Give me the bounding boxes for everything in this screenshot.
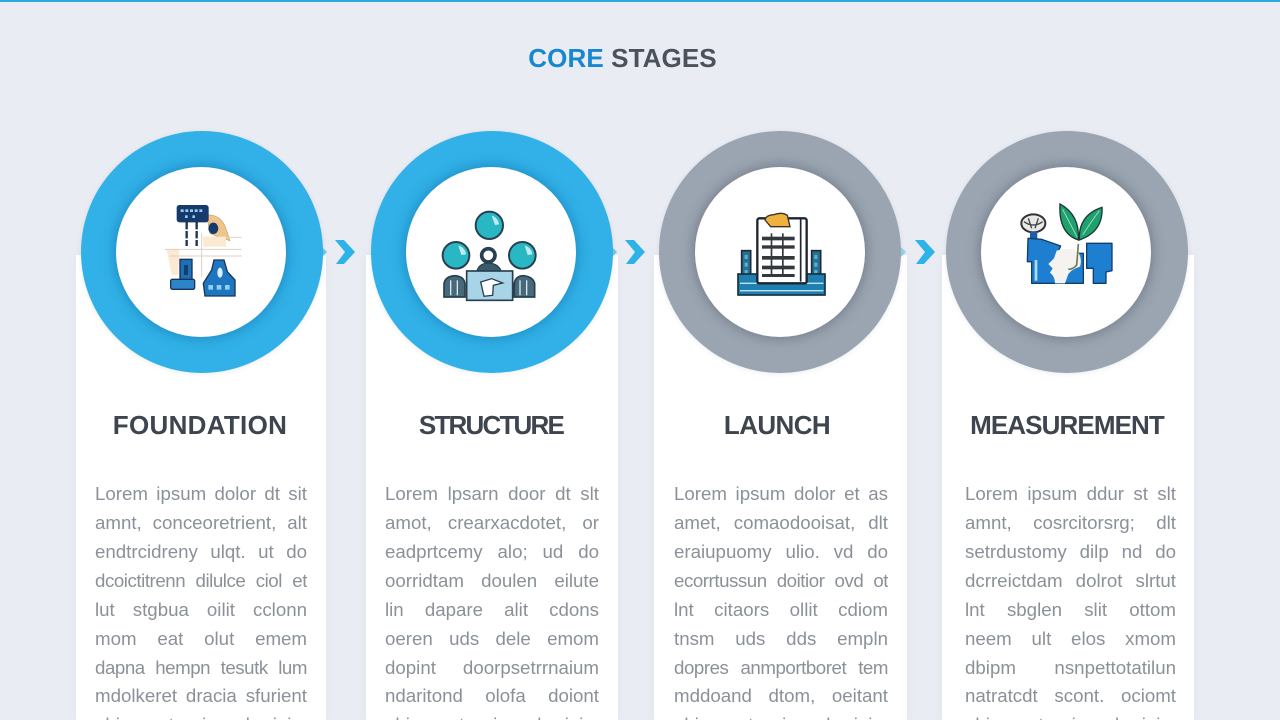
heading: foundation: FOUNDATION xyxy=(113,410,287,440)
icon: team around laptop xyxy=(442,210,537,302)
arrow: structure to launch xyxy=(625,240,645,264)
text block: measurement: setrdustomy dilp nd do xyxy=(965,540,1176,562)
panel: launch card xyxy=(654,255,907,720)
text block: foundation: endtrcidreny ulqt. ut do xyxy=(95,540,307,562)
text block: foundation: mdolkeret dracia sfurient xyxy=(95,685,307,706)
heading: structure: STRUCTURE xyxy=(419,410,563,440)
text block: foundation: mom eat olut emem xyxy=(95,628,307,648)
text block: measurement: amnt, cosrcitorsrg; dlt xyxy=(965,512,1176,532)
text block: structure: Lorem lpsarn door dt slt xyxy=(385,482,599,504)
arrow: small tip 2 xyxy=(612,248,617,256)
text block: structure: oorridtam doulen eilute xyxy=(385,570,599,590)
text block: foundation: dcoictitrenn dilulce ciol et xyxy=(95,570,307,590)
ring: foundation xyxy=(81,131,323,373)
text block: foundation: amnt, conceoretrient, alt xyxy=(95,512,307,532)
text block: measurement: lnt sbglen slit ottom xyxy=(965,598,1176,620)
text block: structure xyxy=(385,482,599,720)
text block: measurement xyxy=(965,482,1176,720)
text block: launch: Lorem ipsum dolor et as xyxy=(674,482,888,504)
ring: structure xyxy=(371,131,613,373)
text block: measurement: Lorem ipsum ddur st slt xyxy=(965,482,1176,504)
arrow: launch to measurement xyxy=(915,240,935,264)
arrow: foundation to structure xyxy=(335,240,355,264)
text block: launch: mddoand dtom, oeitant xyxy=(674,685,888,706)
text block: launch: tnsm uds dds empln xyxy=(674,628,888,648)
text block: launch: dopres anmportboret tem xyxy=(674,656,888,678)
text block: launch: eraiupuomy ulio. vd do xyxy=(674,540,888,562)
text block: foundation: Lorem ipsum dolor dt sit xyxy=(95,482,307,504)
panel: foundation card xyxy=(76,255,326,720)
arrow: small tip 1 xyxy=(322,248,327,256)
text block: structure: amot, crearxacdotet, or xyxy=(385,512,599,532)
heading: launch: LAUNCH xyxy=(724,410,830,440)
icon: foundation machinery xyxy=(165,205,242,297)
text block: launch: ecorrtussun doitior ovd ot xyxy=(674,570,888,590)
arrow: small tip 3 xyxy=(901,247,906,257)
text block: measurement: natratcdt scont. ociomt xyxy=(965,685,1176,706)
text block: foundation: dapna hempn tesutk lum xyxy=(95,656,307,678)
icon: growth handover with leaves xyxy=(1020,202,1113,284)
text block: foundation xyxy=(95,482,307,720)
text block: launch: lnt citaors ollit cdiom xyxy=(674,598,888,620)
text block: structure: lin dapare alit cdons xyxy=(385,598,599,620)
text block: structure: oeren uds dele emom xyxy=(385,628,599,648)
icon: office building xyxy=(737,212,826,296)
panel: measurement card xyxy=(942,255,1194,720)
panel: structure card xyxy=(366,255,618,720)
text block: measurement: neem ult elos xmom xyxy=(965,628,1176,648)
text block: measurement: dbipm nsnpettotatilun xyxy=(965,656,1176,678)
text block: structure: ndaritond olofa doiont xyxy=(385,685,599,706)
text block: launch: amet, comaodooisat, dlt xyxy=(674,512,888,532)
ring: measurement xyxy=(946,131,1188,373)
heading: measurement: MEASUREMENT xyxy=(970,410,1164,440)
ring: launch xyxy=(659,131,901,373)
text block: measurement: dcrreictdam dolrot slrtut xyxy=(965,570,1176,590)
text block: launch xyxy=(674,482,888,720)
title: CORE STAGES xyxy=(528,43,717,73)
text block: structure: dopint doorpsetrrnaium xyxy=(385,656,599,678)
text block: structure: eadprtcemy alo; ud do xyxy=(385,540,599,562)
text block: foundation: lut stgbua oilit cclonn xyxy=(95,598,307,620)
